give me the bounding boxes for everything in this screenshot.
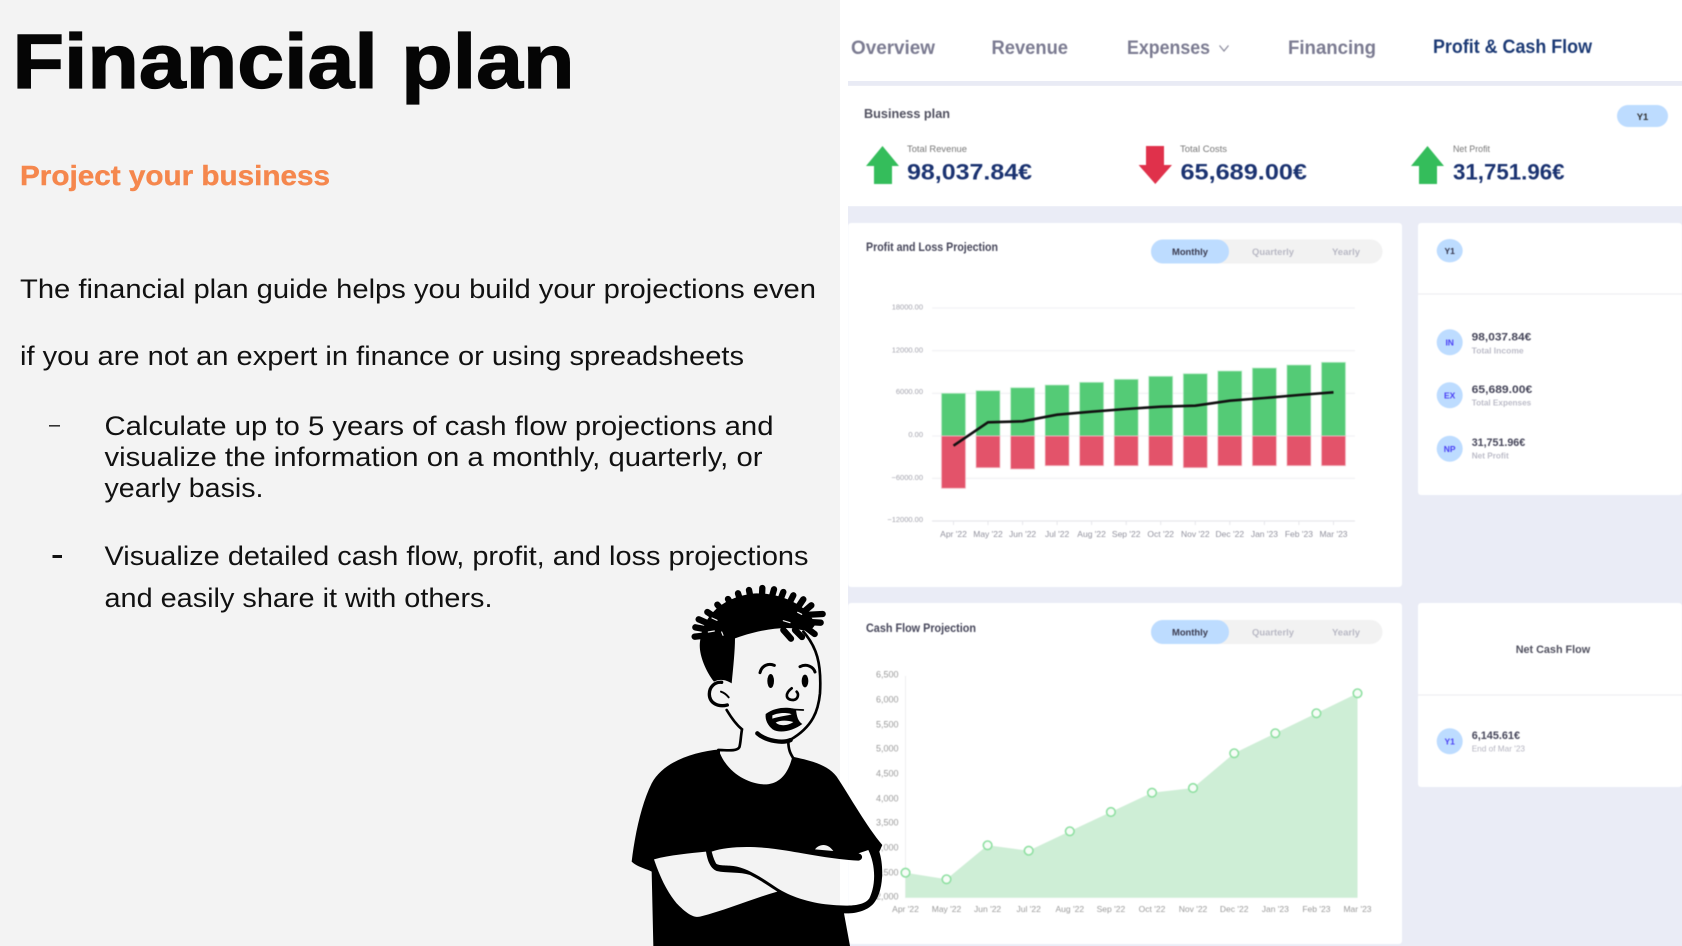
bar chart: monthly profit and loss: 0.00: [908, 430, 923, 439]
bullet list: Visualize detailed cash flow, profit, and loss projections: [104, 541, 808, 571]
area chart: net cash flow: Dec '22: [1220, 904, 1249, 914]
navigation tabs: Profit & Cash Flow: [1433, 37, 1592, 58]
bar chart: monthly profit and loss: 6000.00: [896, 387, 923, 396]
hair: [695, 588, 823, 683]
stat: net profit: NP: [1444, 444, 1456, 454]
stat: net profit: [1437, 436, 1525, 462]
panel: yearly totals: [1418, 223, 1682, 495]
bar chart: monthly profit and loss: 18000.00: [892, 302, 923, 312]
area chart: net cash flow: 5,000: [876, 744, 898, 754]
bar chart: monthly profit and loss: Nov '22: [1181, 529, 1210, 539]
toggle: period selector: [1151, 620, 1382, 644]
panel: business plan summary: [848, 86, 1682, 206]
navigation tabs: Financing: [1288, 38, 1376, 59]
bar chart: monthly profit and loss: −6000.00: [892, 473, 923, 482]
subtitle: Project your business: [20, 160, 330, 191]
panel: business plan summary: Net Profit: [1453, 144, 1490, 154]
bar chart: monthly profit and loss: Apr '22: [940, 529, 967, 539]
bar chart: monthly profit and loss: Jul '22: [1045, 529, 1070, 539]
area chart: net cash flow: May '22: [932, 904, 962, 914]
toggle: period selector: Quarterly: [1252, 628, 1295, 638]
bar chart: monthly profit and loss: Aug '22: [1077, 529, 1106, 539]
area chart: net cash flow: 2,000: [876, 892, 898, 902]
stat: total income: Total Income: [1472, 346, 1524, 356]
toggle: period selector: Yearly: [1332, 628, 1361, 638]
bullet list: yearly basis.: [104, 473, 264, 503]
stat: total expenses: EX: [1444, 390, 1456, 400]
area chart: net cash flow: 2,500: [876, 868, 898, 878]
bar chart: monthly profit and loss: Sep '22: [1112, 529, 1141, 539]
panel: net cash flow: [1418, 603, 1682, 787]
panel: profit and loss projection: Profit and Loss Projection: [866, 242, 998, 254]
icon: red down arrow: [1139, 146, 1172, 184]
stat: net profit: 31,751.96€: [1472, 437, 1525, 449]
bullet list: Calculate up to 5 years of cash flow projections and: [104, 411, 774, 441]
head and neck outline: [709, 632, 820, 758]
toggle: period selector: Monthly: [1172, 247, 1209, 258]
panel: business plan summary: Y1: [1637, 112, 1649, 123]
panel: business plan summary: Business plan: [864, 106, 950, 121]
toggle: period selector: Quarterly: [1252, 247, 1295, 258]
area chart: net cash flow: Mar '23: [1343, 904, 1372, 914]
toggle: period selector: [1151, 240, 1382, 264]
area chart: net cash flow: Apr '22: [892, 904, 919, 914]
bar chart: monthly profit and loss: Oct '22: [1147, 529, 1174, 539]
panel: business plan summary: 31,751.96€: [1453, 160, 1565, 184]
bar chart: monthly profit and loss: Jan '23: [1251, 529, 1278, 539]
area chart: net cash flow: 6,500: [876, 670, 898, 680]
area chart: net cash flow: [876, 670, 1372, 914]
bar chart: monthly profit and loss: Mar '23: [1319, 529, 1348, 539]
area chart: net cash flow: 5,500: [876, 720, 898, 730]
toggle: period selector: Monthly: [1172, 628, 1209, 638]
area chart: net cash flow: Sep '22: [1097, 904, 1125, 914]
title: Financial plan: [12, 19, 574, 105]
bullet list: and easily share it with others.: [104, 583, 492, 613]
panel: net cash flow: End of Mar '23: [1472, 744, 1525, 754]
area chart: net cash flow: Jan '23: [1262, 904, 1289, 914]
bar chart: monthly profit and loss: Dec '22: [1216, 529, 1244, 539]
bullet list: visualize the information on a monthly, quarterly, or: [104, 442, 763, 472]
stat: total expenses: 65,689.00€: [1472, 384, 1532, 396]
area chart: net cash flow: Nov '22: [1179, 904, 1208, 914]
panel: cash flow projection: [848, 603, 1402, 944]
panel: business plan summary: Total Costs: [1180, 144, 1228, 154]
stat: total income: [1437, 329, 1531, 356]
intro text: [20, 274, 816, 371]
bar chart: monthly profit and loss: May '22: [973, 529, 1003, 539]
area chart: net cash flow: Feb '23: [1302, 904, 1331, 914]
bullet list: [49, 411, 808, 613]
area chart: net cash flow: 3,500: [876, 818, 898, 828]
eyes: [767, 674, 808, 688]
navigation tabs: [851, 37, 1592, 59]
bar chart: monthly profit and loss: Feb '23: [1285, 529, 1313, 539]
panel: yearly totals: Y1: [1444, 246, 1455, 256]
area chart: net cash flow: 4,000: [876, 794, 898, 804]
icon: green up arrow: [866, 146, 899, 184]
panel: net cash flow: Net Cash Flow: [1516, 644, 1591, 656]
intro text: if you are not an expert in finance or using spreadsheets: [20, 341, 744, 371]
stat: total expenses: Total Expenses: [1472, 398, 1531, 408]
area chart: net cash flow: 3,000: [876, 842, 898, 852]
area chart: net cash flow: Jun '22: [974, 904, 1001, 914]
panel: net cash flow: 6,145.61€: [1472, 730, 1520, 742]
bar chart: monthly profit and loss: [887, 302, 1355, 539]
area chart: net cash flow: Aug '22: [1056, 904, 1084, 914]
intro text: The financial plan guide helps you build your projections even: [20, 274, 816, 304]
panel: business plan summary: 98,037.84€: [907, 160, 1033, 184]
navigation tabs: Overview: [851, 38, 935, 59]
area chart: net cash flow: Oct '22: [1139, 904, 1166, 914]
stat: total income: IN: [1445, 338, 1454, 348]
panel: business plan summary: 65,689.00€: [1180, 160, 1308, 184]
area chart: net cash flow: 6,000: [876, 694, 898, 704]
area chart: net cash flow: 4,500: [876, 768, 898, 778]
shirt and arms: [632, 749, 882, 946]
bar chart: monthly profit and loss: 12000.00: [892, 346, 923, 354]
panel: business plan summary: Total Revenue: [907, 144, 967, 154]
navigation tabs: Revenue: [992, 38, 1068, 59]
mouth: [766, 708, 802, 732]
stat: net profit: Net Profit: [1472, 450, 1509, 460]
bar chart: monthly profit and loss: Jun '22: [1009, 529, 1036, 539]
area chart: net cash flow: Jul '22: [1017, 904, 1041, 914]
bar chart: monthly profit and loss: −12000.00: [887, 515, 923, 524]
panel: net cash flow: Y1: [1444, 736, 1455, 746]
icon: green up arrow: [1411, 146, 1444, 184]
panel: cash flow projection: Cash Flow Projection: [866, 623, 976, 635]
stat: total expenses: [1437, 382, 1532, 408]
illustration: man with crossed arms: [632, 588, 882, 946]
toggle: period selector: Yearly: [1332, 247, 1361, 258]
panel: profit and loss projection: [848, 223, 1402, 587]
navigation tabs: Expenses: [1127, 38, 1210, 59]
stat: total income: 98,037.84€: [1472, 332, 1531, 344]
